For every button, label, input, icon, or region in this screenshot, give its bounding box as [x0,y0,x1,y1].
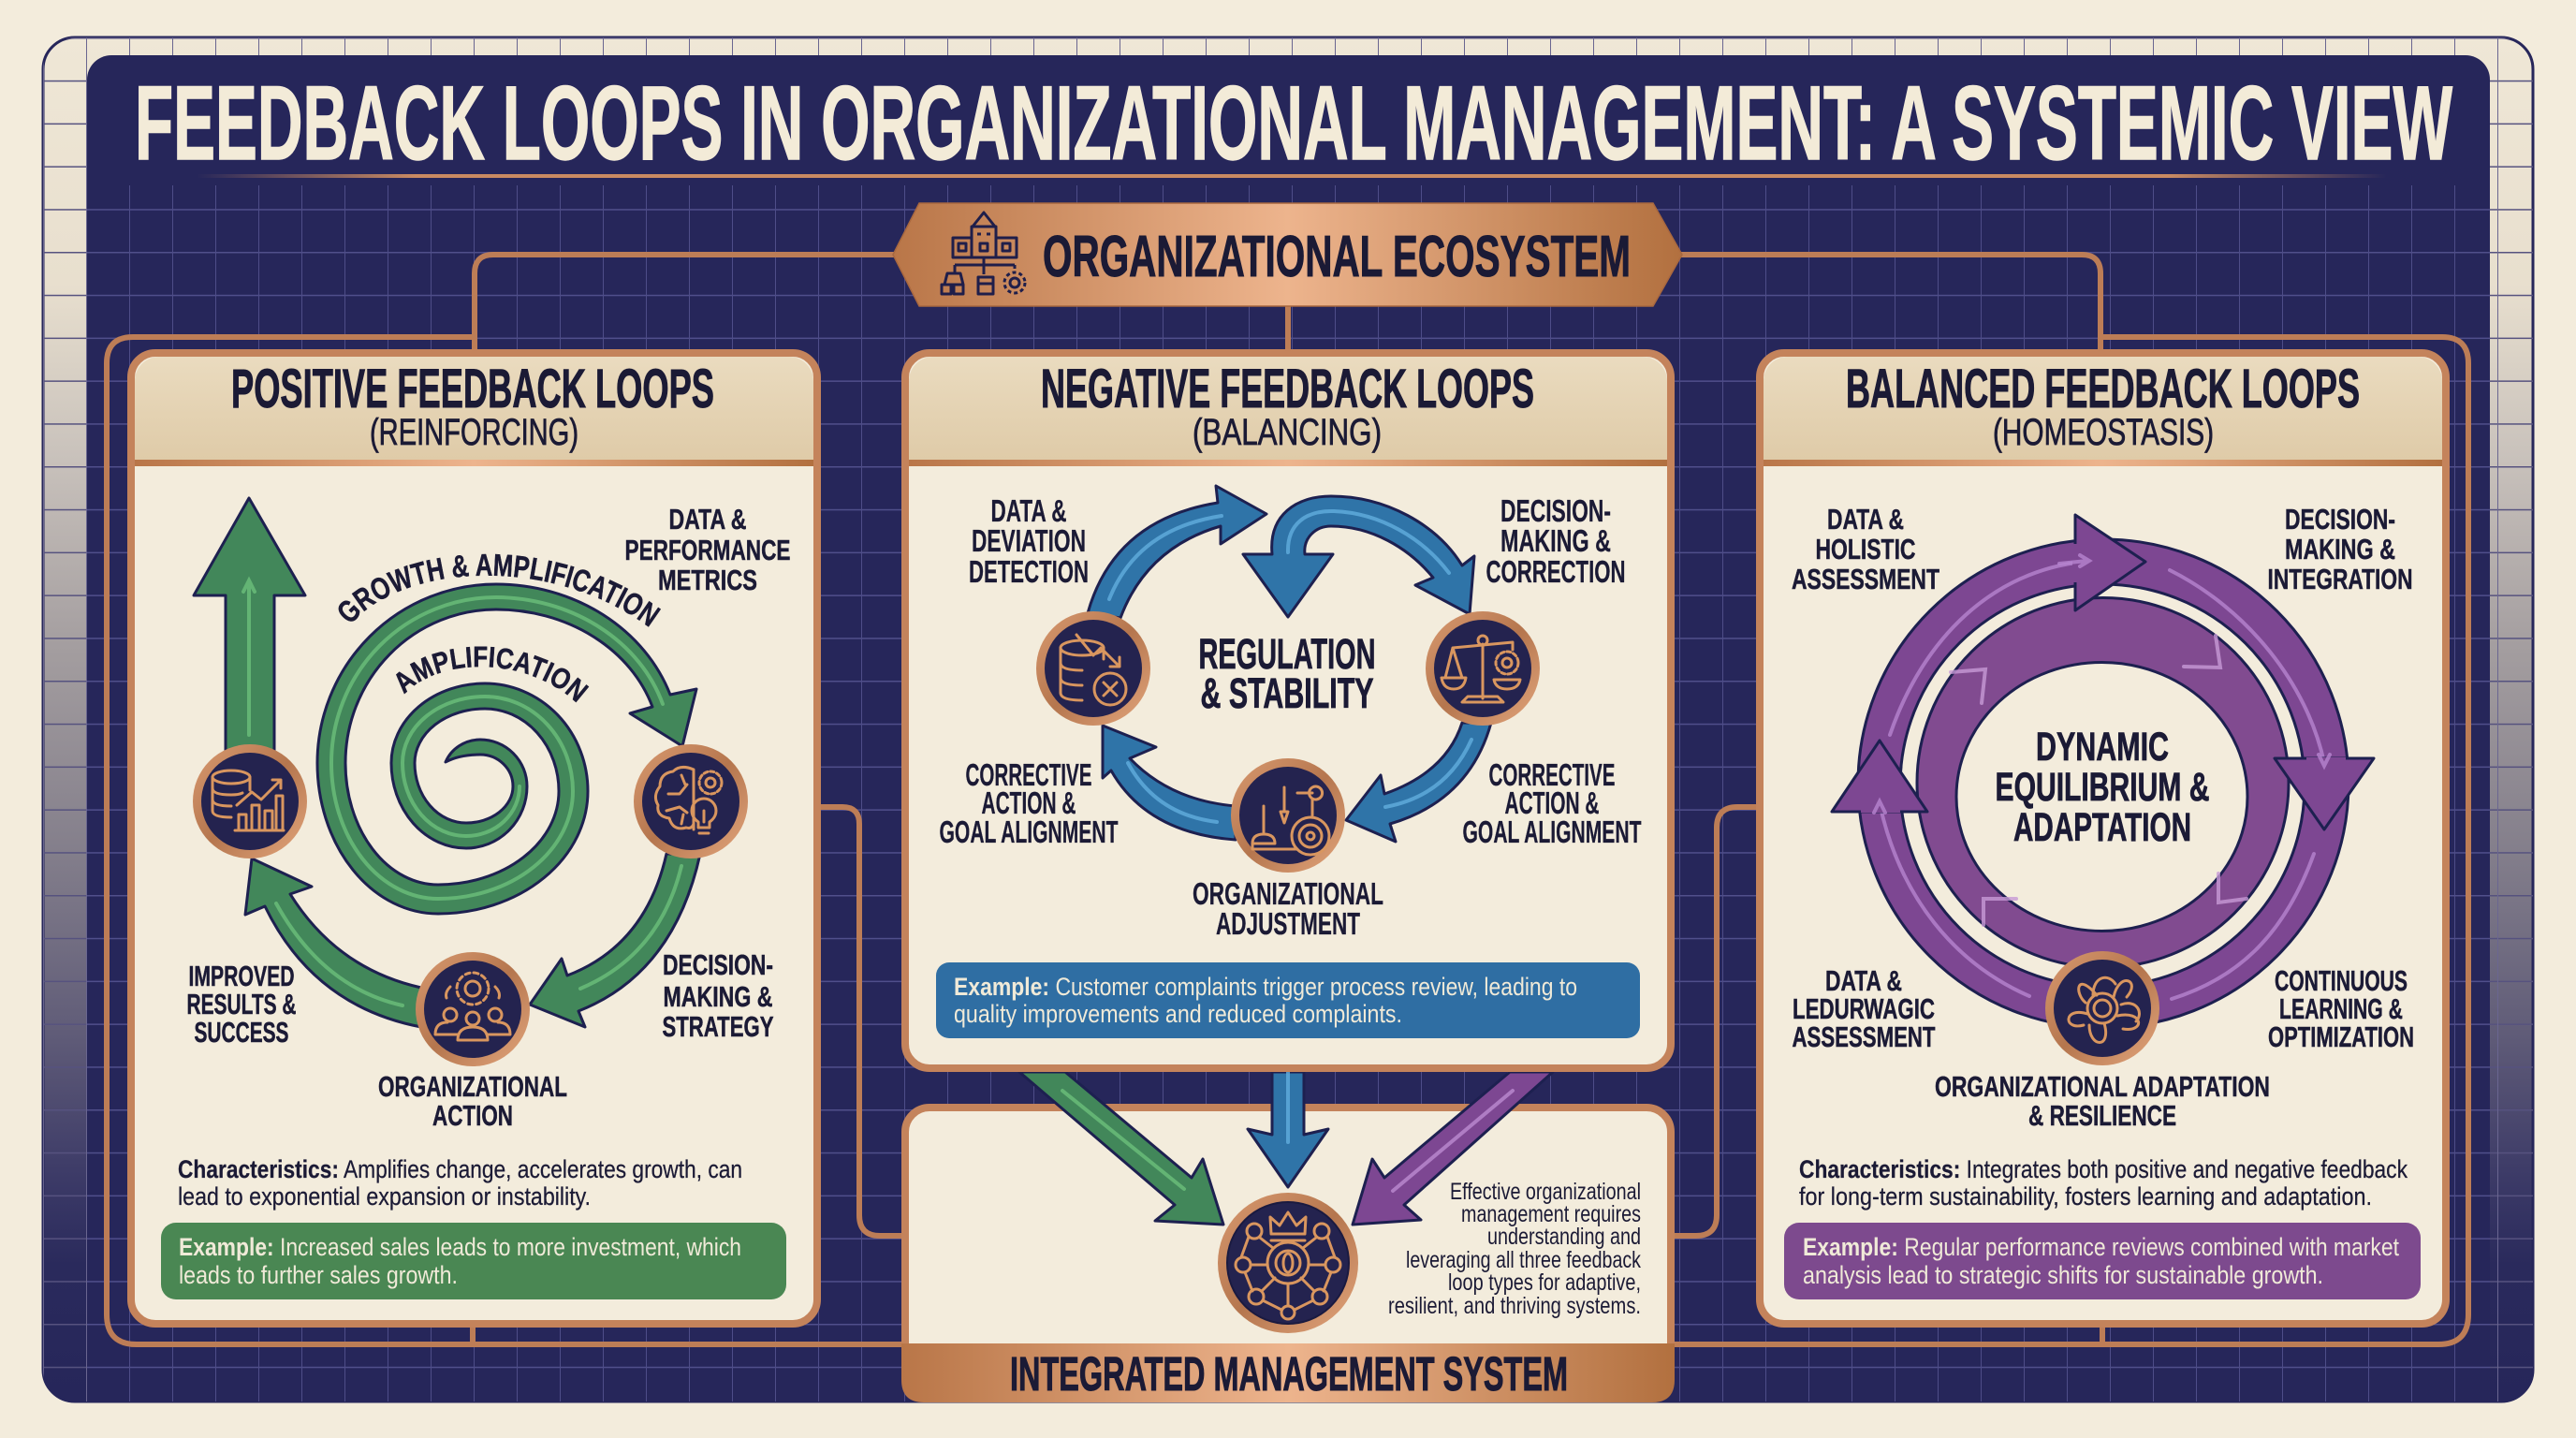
characteristics text: lead to exponential expansion or instability. [178,1182,591,1211]
label: decision integration [2267,503,2413,595]
arrow: adjustment to data [1103,726,1236,840]
arrow: decision to action [530,854,700,1027]
panel: balanced feedback loops [1760,353,2446,1324]
label: decision correction: DECISION- [1500,493,1611,528]
label: decision making: STRATEGY [663,1010,774,1043]
characteristics text [178,1155,742,1211]
panel: positive feedback loops [127,349,821,1328]
node: results data [193,744,307,858]
connector lines from ecosystem to panels [107,255,2468,1344]
node: scale correction [1426,611,1540,726]
arrow: action to results [245,858,421,1027]
footer label: INTEGRATED MANAGEMENT SYSTEM [1010,1347,1568,1401]
label: organizational action [378,1070,567,1132]
characteristics text: Characteristics: Integrates both positive and negative feedback [1799,1155,2408,1183]
integrated description: Effective organizational [1450,1179,1641,1205]
arrow: upward growth [194,498,305,754]
center label: regulation: REGULATION [1198,630,1376,678]
label: data and performance [625,503,790,596]
example box: Example: Increased sales leads to more investment, which [179,1233,741,1261]
curved text: growth and amplification: GROWTH & AMPLIFICATION [339,554,661,627]
label: corrective right: GOAL ALIGNMENT [1462,814,1642,849]
label: data holistic: ASSESSMENT [1792,563,1939,595]
label: decision making: DECISION- [663,948,773,981]
panel header [135,357,813,460]
label: organizational adjustment: ADJUSTMENT [1216,906,1360,941]
label: continuous learning [2268,964,2414,1053]
label: organizational adjustment: ORGANIZATIONAL [1193,876,1383,911]
center label: dynamic equilibrium [1996,725,2209,850]
label: corrective left [940,757,1118,849]
badge label: ORGANIZATIONAL ECOSYSTEM [1043,225,1631,289]
node: deviation detection [1036,611,1150,726]
panel header [909,357,1667,460]
example box: analysis lead to strategic shifts for sustainable growth. [1803,1261,2323,1289]
label: data holistic [1792,503,1939,595]
label: organizational action: ORGANIZATIONAL [378,1070,567,1103]
badge: organizational ecosystem [893,203,1682,306]
integrated description [1388,1179,1641,1319]
label: organizational adaptation: ORGANIZATIONAL ADAPTATION [1935,1070,2270,1103]
label: data deviation: DETECTION [969,554,1089,589]
label: data assessment lower: ASSESSMENT [1792,1020,1936,1053]
example box: quality improvements and reduced complaints. [954,1000,1402,1028]
label: corrective right [1462,757,1642,849]
label: decision integration: INTEGRATION [2267,563,2413,595]
footer band [901,1343,1675,1402]
integrated description: loop types for adaptive, [1448,1269,1641,1296]
spiral: growth and amplification [317,584,696,914]
curved label inner [404,667,582,709]
header subtitle: (REINFORCING) [370,412,578,453]
label: data and performance: METRICS [658,564,757,596]
label: data deviation: DEVIATION [972,523,1086,558]
characteristics text: for long-term sustainability, fosters learning and adaptation. [1799,1182,2372,1211]
label: data assessment lower: DATA & [1825,964,1902,997]
example box [161,1223,786,1299]
curved label outer [350,576,661,637]
panel: integrated management system [901,1108,1675,1402]
integrated description: understanding and [1487,1224,1641,1250]
label: decision correction [1486,493,1625,589]
center label: regulation: & STABILITY [1200,669,1374,717]
node: adaptation swirl [2045,951,2159,1065]
arrow: data to top [1088,486,1266,618]
arrow: double headed top [1243,496,1474,617]
panel: negative feedback loops [905,353,1671,1068]
label: improved results [187,960,296,1049]
example box [936,962,1640,1038]
label: corrective right: ACTION & [1505,785,1599,820]
icon: integrated network [1218,1193,1358,1333]
label: improved results: IMPROVED [189,960,294,992]
label: corrective left: ACTION & [981,785,1076,820]
label: data assessment lower [1792,964,1936,1053]
label: corrective right: CORRECTIVE [1488,757,1616,792]
label: data and performance: DATA & [668,503,747,536]
center label: regulation [1198,630,1376,717]
label: improved results: SUCCESS [195,1016,288,1049]
outer purple ring [1858,539,2349,1028]
header title: NEGATIVE FEEDBACK LOOPS [1041,359,1534,419]
label: decision correction: MAKING & [1500,523,1611,558]
arrowhead: left [1832,741,1927,813]
characteristics text: Characteristics: Amplifies change, accelerates growth, can [178,1155,742,1183]
arrow: decision to adjustment [1346,723,1491,842]
node: adjustment tools [1231,758,1345,873]
label: continuous learning: LEARNING & [2279,992,2403,1025]
label: decision correction: CORRECTION [1486,554,1625,589]
characteristics text [1799,1155,2408,1211]
label: corrective left: GOAL ALIGNMENT [940,814,1118,849]
arrowhead: top [2059,515,2145,610]
inner purple ring [1917,598,2289,967]
label: continuous learning: CONTINUOUS [2275,964,2408,997]
label: decision integration: DECISION- [2285,503,2395,536]
label: decision integration: MAKING & [2285,533,2395,565]
header title: POSITIVE FEEDBACK LOOPS [231,359,714,419]
label: data deviation: DATA & [990,493,1067,528]
integrated description: resilient, and thriving systems. [1388,1293,1641,1319]
header subtitle: (BALANCING) [1193,412,1382,453]
example box [1784,1223,2421,1299]
center label: dynamic equilibrium: DYNAMIC [2036,725,2169,770]
integrated description: management requires [1461,1201,1641,1227]
arrow: blue to integrated [1248,1072,1328,1187]
label: organizational adaptation [1935,1070,2270,1132]
example box: leads to further sales growth. [179,1261,458,1289]
center label: dynamic equilibrium: EQUILIBRIUM & [1996,765,2209,810]
label: improved results: RESULTS & [187,988,296,1020]
label: data deviation [969,493,1089,589]
label: organizational adjustment [1193,876,1383,941]
label: data and performance: PERFORMANCE [625,534,790,566]
label: decision making: MAKING & [663,980,773,1013]
label: decision making [663,948,774,1043]
node: decision brain [634,744,748,858]
curved text: amplification: AMPLIFICATION [396,646,590,702]
node: organizational action team [416,952,530,1066]
header subtitle: (HOMEOSTASIS) [1993,412,2214,453]
arrow: purple to integrated [1353,1072,1553,1225]
label: organizational action: ACTION [432,1099,513,1132]
label: data holistic: HOLISTIC [1816,533,1915,565]
center label: dynamic equilibrium: ADAPTATION [2013,805,2191,850]
arrowhead: right [2275,755,2374,829]
label: continuous learning: OPTIMIZATION [2268,1020,2414,1053]
label: data assessment lower: LEDURWAGIC [1793,992,1935,1025]
label: corrective left: CORRECTIVE [966,757,1091,792]
example box: Example: Customer complaints trigger process review, leading to [954,973,1577,1001]
label: organizational adaptation: & RESILIENCE [2028,1099,2176,1132]
icon: organization building [942,213,1025,294]
label: data holistic: DATA & [1827,503,1904,536]
integrated description: leveraging all three feedback [1406,1247,1641,1273]
arrow: green to integrated [1019,1072,1223,1225]
example box: Example: Regular performance reviews combined with market [1803,1233,2399,1261]
panel header [1764,357,2442,460]
